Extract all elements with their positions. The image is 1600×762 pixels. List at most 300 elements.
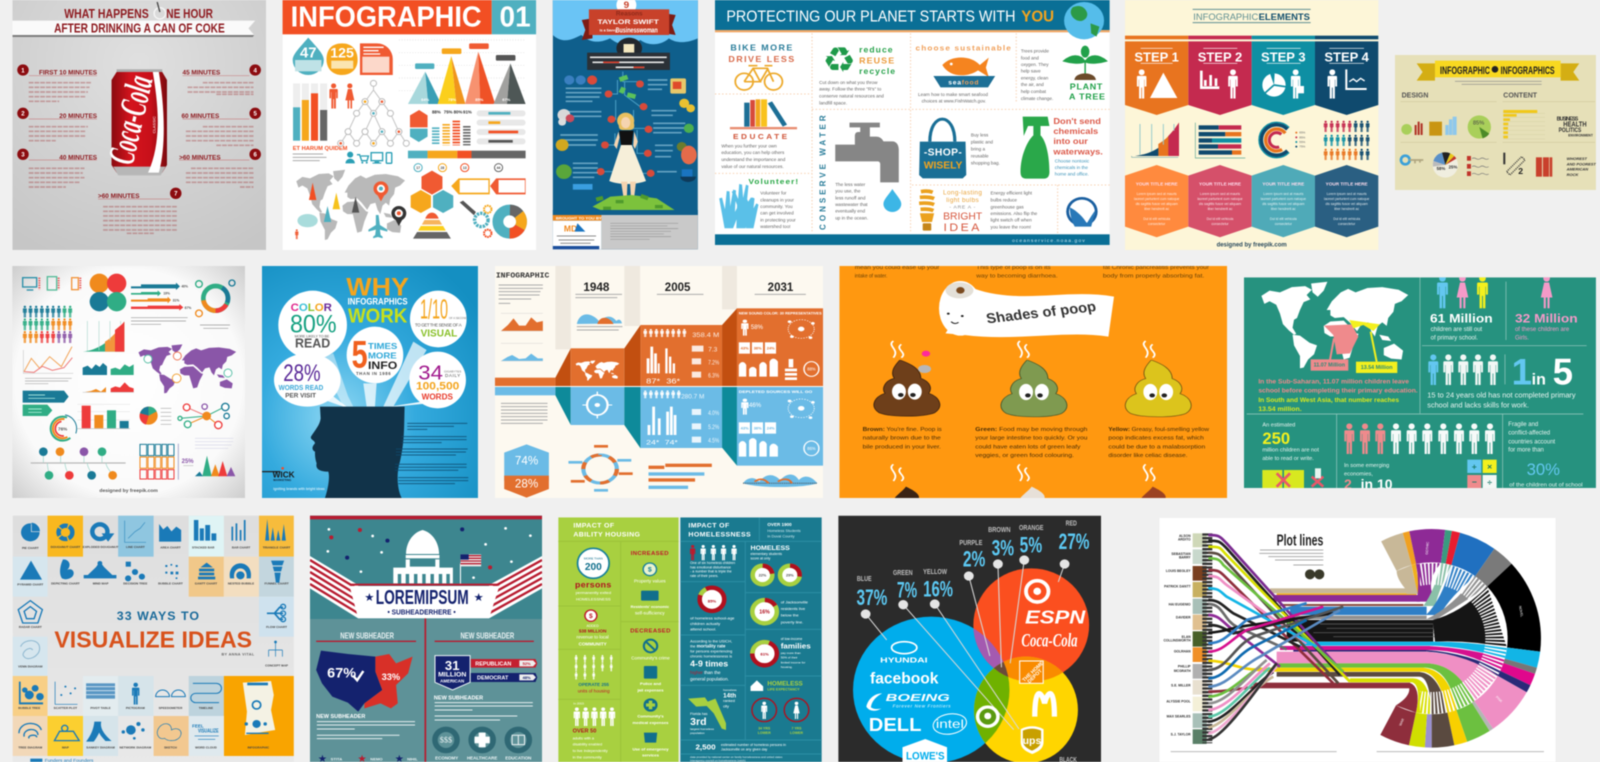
leader lines	[861, 555, 1070, 730]
volunteer: can get involved	[760, 211, 794, 216]
homeless people row: has emotional disturbance	[690, 565, 731, 569]
poop captions: Brown: You're fine. Poop is	[863, 427, 942, 433]
percentage labels: GREEN	[893, 568, 913, 577]
heading	[346, 277, 409, 324]
34 daily words	[416, 362, 461, 402]
hexagon badge and stripe bars	[410, 109, 472, 145]
round icons: EDUCATION	[505, 756, 531, 761]
conserve water: up in the ocean.	[835, 215, 868, 220]
step columns	[1125, 36, 1378, 115]
triangle chart: 64%	[421, 97, 430, 102]
color 80 percent: READ	[295, 337, 330, 351]
28 percent	[279, 360, 323, 399]
lower chevrons: Dui id elit vehicula	[1143, 217, 1170, 221]
mortality rate: 4-9 times	[690, 659, 728, 669]
arrow bars: 31%	[173, 299, 179, 303]
authors: DAVIDER	[1176, 615, 1191, 619]
timeline step markers and labels: 4	[253, 68, 258, 74]
families ring	[752, 637, 811, 669]
arc segment dividers and labels	[1398, 541, 1524, 727]
florida: 14th	[723, 692, 736, 699]
timeline step markers and labels: 60 MINUTES	[182, 113, 219, 120]
ability housing column: permanently exited	[576, 590, 612, 595]
usa split map	[316, 651, 413, 712]
timeline step markers and labels: >60 MINUTES	[179, 154, 221, 161]
bright idea bulb: IDEA	[944, 221, 982, 234]
arc segment dividers and labels: GOTHIC	[1425, 541, 1430, 555]
attend school ring: 85%	[708, 599, 717, 604]
blue brand logos: facebook	[870, 670, 939, 687]
chart tile backgrounds	[13, 516, 294, 756]
percent hexagons	[504, 444, 549, 498]
spray bottle and chemicals: Choose nontoxic	[1055, 158, 1090, 163]
mortality rate: chronic homelessness is	[690, 654, 732, 658]
educate	[721, 99, 797, 169]
ability housing column: 200	[585, 562, 602, 573]
chart: rising area	[1132, 123, 1179, 157]
homeless people row: - a number that is triple the	[690, 570, 732, 574]
flag	[460, 554, 481, 585]
wick logo: WICK	[273, 470, 295, 479]
white comb over fan	[1367, 573, 1497, 703]
mortality rate: higher than the	[690, 670, 721, 675]
coke can	[101, 69, 167, 175]
speech circles	[274, 291, 467, 408]
subheaders: NEW SUBHEADER	[340, 631, 394, 640]
head silhouette	[311, 407, 405, 498]
250 million	[1262, 422, 1323, 488]
poop captions: veggies, or green food colouring.	[975, 453, 1074, 459]
center divider	[423, 618, 428, 762]
triangle chart: 78%	[448, 97, 457, 102]
homeless rings: HOMELESS	[751, 545, 790, 552]
network nodes	[178, 403, 229, 429]
segmented bar: 28	[441, 166, 444, 170]
volunteer: watershed too!	[760, 224, 791, 229]
1948 contents	[576, 360, 619, 418]
pie chart	[140, 407, 171, 425]
authors: ALSON	[1179, 534, 1191, 538]
chart legend: 75%	[1299, 145, 1306, 149]
families ring: of low-income	[781, 637, 802, 641]
dividers	[1247, 277, 1587, 488]
gears and donut	[460, 201, 522, 237]
reduce reuse recycle: away. Follow the three "R's" to	[819, 87, 882, 92]
wick logo	[262, 467, 325, 491]
panel: lorem ipsum capitol	[310, 516, 542, 762]
people rows	[23, 306, 72, 343]
bright idea bulb: light switch off when	[991, 218, 1032, 223]
content charts: AMERICAN	[1566, 167, 1588, 172]
homeless total: estimated number of homeless persons in	[721, 743, 786, 747]
tile labels: VENN DIAGRAM	[18, 665, 43, 669]
plant a tree: PLANT	[1070, 82, 1103, 91]
percent hexagons: 28%	[515, 477, 538, 491]
percentage labels: 37%	[857, 586, 887, 610]
reduce reuse recycle: conserve natural resources and	[819, 93, 884, 98]
book cover thumbnails	[1193, 533, 1207, 744]
timeline	[31, 447, 126, 480]
lower chevrons: laoreet parturient cum natoque	[1134, 197, 1179, 201]
authors: HAI EUGENIO	[1169, 602, 1191, 606]
segmented bar: 44	[497, 166, 501, 170]
educate: EDUCATE	[733, 132, 790, 141]
top cut-off copy: body from properly absorbing fat.	[1103, 273, 1205, 279]
taylor swift figure	[609, 113, 646, 200]
headings: 1948	[583, 281, 609, 294]
device icons	[345, 152, 392, 164]
spray bottle and chemicals	[1021, 116, 1103, 179]
plant a tree: food and	[1021, 55, 1039, 60]
sub-saharan text: 13.54 million.	[1258, 407, 1302, 413]
poop captions: could have eaten lots of green leafy	[975, 445, 1081, 450]
poverty ring: 16%	[759, 610, 770, 616]
250 million: million children are not	[1262, 448, 1319, 454]
tile labels: TRIANGLE CHART	[263, 546, 290, 550]
volunteer: cleanups in your	[760, 197, 794, 202]
device grid	[140, 444, 178, 480]
conserve water: wastewater that	[835, 202, 868, 207]
fragile countries: 30%	[1527, 460, 1560, 479]
body copy right	[434, 696, 533, 720]
bike more drive less	[728, 43, 796, 90]
credit: designed by freepik.com	[1217, 242, 1287, 248]
republican democrat: 52%	[522, 661, 531, 666]
increased: DECREASED	[630, 628, 671, 634]
2005 contents: 7.2%	[708, 359, 720, 366]
reduce reuse recycle: REUSE	[859, 56, 895, 65]
percent label	[182, 438, 233, 466]
250 million: 250	[1262, 429, 1290, 448]
spray bottle and chemicals: home and office.	[1055, 172, 1089, 177]
families ring: housing.	[781, 665, 793, 669]
shop wisely: shopping bag.	[971, 160, 1000, 165]
star legend	[319, 754, 418, 762]
tile labels: PYRAMID CHART	[17, 582, 43, 586]
content charts: WHOREST	[1567, 156, 1588, 161]
percentage labels: BROWN	[988, 525, 1011, 534]
orange step band	[495, 308, 823, 386]
poop captions: bile produced in your liver.	[863, 445, 941, 450]
2031 contents: 36%	[754, 426, 762, 431]
step columns: STEP 3	[1261, 49, 1306, 64]
bright idea bulb: Energy efficient light	[991, 191, 1033, 196]
number markers and pipes	[597, 72, 655, 177]
title ribbon: Businesswoman	[616, 26, 658, 35]
2031 contents: 24%	[767, 346, 775, 351]
homelessness column	[680, 517, 822, 762]
ability housing column: COMMUNITY	[579, 641, 607, 646]
32 million: 32 Million	[1515, 312, 1578, 325]
poop captions: your large intestine too quickly. Or you	[975, 435, 1088, 441]
mortality rate	[690, 639, 732, 681]
increased: medical expenses	[633, 720, 669, 725]
shop wisely: reusable	[971, 153, 989, 158]
panel: 33 ways to visualize ideas	[13, 516, 294, 762]
percentage labels: 5%	[1020, 533, 1042, 557]
striped wings	[310, 556, 542, 618]
content charts: ENVIRONMENT	[1568, 133, 1593, 137]
hexagon badge and stripe bars: 88%	[432, 109, 441, 114]
homeless rings	[751, 545, 800, 584]
blue brand logos: DELL	[869, 715, 922, 736]
florida: population	[690, 731, 705, 735]
toilet paper banner: Shades of poop	[985, 299, 1098, 327]
plant a tree: Trees provide	[1021, 49, 1049, 54]
educate: education, you can help others	[721, 150, 785, 155]
chart legend: 85%	[1299, 135, 1306, 139]
top cut-off copy: This type of poop is on its	[976, 265, 1051, 271]
venn circles	[853, 568, 1089, 762]
2005 contents: 4.0%	[708, 409, 720, 417]
61 million	[1430, 275, 1493, 342]
line chart	[23, 347, 73, 384]
spray bottle and chemicals: chemicals in the	[1055, 165, 1088, 170]
panel: infographic elements steps	[1125, 0, 1378, 250]
title ribbon: Reasons	[616, 11, 643, 18]
plant a tree: the air, and	[1021, 82, 1044, 87]
lower chevrons: Lorem ipsum sed at mauris	[1327, 192, 1367, 196]
timeline step markers and labels: 6	[253, 153, 258, 159]
world map: 11.07 Million	[1314, 363, 1345, 369]
homeless rings: 29%	[786, 573, 794, 577]
percentage labels: 27%	[1059, 530, 1090, 554]
spray bottle and chemicals: Don't send	[1053, 116, 1101, 126]
lower chevrons: laoreet parturient cum natoque	[1261, 197, 1306, 201]
bright idea bulb: bulbs reduce	[991, 198, 1018, 203]
timeline step markers and labels: 20 MINUTES	[59, 113, 97, 120]
spray bottle and chemicals: into our	[1053, 136, 1088, 146]
families ring: limited income for	[781, 660, 805, 664]
attend school ring	[690, 588, 735, 632]
timeline step markers and labels: 7	[174, 192, 178, 198]
2 in 10: In some emerging	[1344, 463, 1389, 469]
title	[54, 609, 255, 657]
lower chevrons: YOUR TITLE HERE	[1262, 182, 1304, 187]
headings: 2005	[665, 281, 690, 294]
tile labels: EXPLODED DOUGHNUT	[83, 545, 119, 549]
shop wisely: plastic and	[971, 139, 994, 144]
34 daily words: DAILY	[445, 373, 460, 378]
homeless total: 2,500	[695, 743, 716, 752]
reduce reuse recycle: Cut down on what you throw	[819, 80, 878, 85]
tile labels: RADAR CHART	[19, 625, 42, 629]
tile labels: PICTOGRAM	[126, 706, 145, 710]
tile labels: WORD CLOUD	[195, 745, 218, 749]
timeline step markers and labels: 3	[21, 153, 25, 159]
fragile countries: conflict-affected	[1508, 431, 1550, 437]
percentage labels: ORANGE	[1019, 523, 1044, 532]
arc segment dividers and labels: WAR	[1398, 717, 1405, 727]
homeless total	[690, 743, 786, 762]
world map	[1261, 282, 1408, 373]
dotted dividers	[715, 33, 1110, 233]
body copy right: NEW SUBHEADER	[434, 696, 483, 702]
segmented bar: 17	[416, 166, 420, 170]
percentage labels: 2%	[963, 547, 985, 572]
educate: When you further your own	[721, 143, 777, 148]
lower chevrons: liber hendrerit ac	[1271, 207, 1296, 211]
republican democrat	[435, 656, 537, 690]
reduce reuse recycle: landfill space.	[819, 101, 847, 106]
34 daily words: 100,500	[416, 380, 459, 392]
one tenth: OF A SECOND	[449, 316, 467, 320]
mortality rate: general population.	[690, 676, 729, 681]
2 in 10: ÷	[1487, 477, 1492, 487]
percent label: 25%	[182, 459, 194, 465]
2005 contents: 7.3	[708, 346, 717, 353]
ribbon title	[1417, 61, 1579, 84]
florida: 3rd	[690, 717, 707, 728]
lower chevrons: YOUR TITLE HERE	[1326, 182, 1368, 187]
title	[1193, 9, 1311, 23]
volunteer: community. You	[760, 204, 793, 209]
title: ELEMENTS	[1259, 12, 1310, 22]
poverty ring: of Jacksonville	[781, 599, 809, 604]
tile labels	[17, 545, 290, 749]
life expectancy	[751, 680, 809, 735]
tile labels: AREA CHART	[160, 546, 181, 550]
tile labels: MIND MAP	[93, 582, 108, 586]
poop captions: Green: Food may be moving through	[975, 427, 1088, 433]
lower chevrons: laoreet parturient cum natoque	[1324, 197, 1369, 201]
sustainable seafood: choose sustainable	[916, 44, 1012, 53]
hexagons, tags and pyramid	[411, 171, 526, 239]
title ribbon: 9	[624, 0, 630, 11]
chart icons	[18, 519, 286, 742]
increased: Police and	[640, 681, 662, 686]
homeless total: Jacksonville on any given day	[721, 748, 768, 752]
coke can: CLASSIC	[151, 116, 156, 133]
2005 contents: 5.2%	[708, 423, 720, 431]
2005 contents: 87*	[646, 377, 661, 385]
5 times more info: THAN IN 1986	[356, 371, 391, 376]
ability housing column: units of housing	[578, 688, 610, 693]
title: BY ANNA VITAL	[221, 653, 255, 657]
device icons	[23, 277, 80, 290]
timeline step markers and labels: 40 MINUTES	[59, 154, 97, 161]
home depot logo: THE HOME	[1021, 660, 1046, 683]
tile labels: BUBBLE CHART	[158, 582, 183, 586]
yellow poop	[1125, 341, 1191, 417]
61 million: 61 Million	[1430, 312, 1493, 325]
2005 contents: 74*	[665, 439, 678, 446]
authors: MCGRATH	[1174, 669, 1191, 673]
tile labels: DOUGHNUT CHART	[51, 545, 80, 549]
1 in 5: 1	[1512, 351, 1532, 392]
segmented bar: 13	[463, 166, 467, 170]
color 80 percent: MORE LIKELY TO BE	[295, 334, 330, 338]
section heads: DESIGN	[1402, 92, 1428, 99]
central body copy	[501, 403, 547, 423]
world map: 13.54 Million	[1361, 365, 1392, 371]
plant a tree	[1021, 46, 1107, 101]
plant a tree: help save	[1021, 69, 1041, 74]
title ribbon: TAYLOR SWIFT	[597, 19, 660, 26]
bike more drive less: DRIVE LESS	[728, 54, 796, 64]
educate: value of our natural resources.	[721, 164, 784, 169]
increased: Residents' economic	[631, 605, 669, 609]
left small charts	[501, 313, 622, 361]
ability housing column: OVER 50	[573, 729, 596, 735]
percentage labels: PURPLE	[959, 538, 982, 547]
conserve water	[818, 113, 901, 230]
horizontal color bands	[1253, 588, 1437, 688]
attend school ring: attend school.	[690, 627, 716, 632]
color 80 percent: 80%	[290, 310, 337, 338]
headings: 2031	[768, 281, 793, 294]
republican democrat: REPUBLICAN	[475, 661, 511, 667]
florida	[688, 688, 737, 735]
tile labels: NESTED BUBBLE	[228, 582, 254, 586]
header	[715, 0, 1110, 39]
authors	[1163, 534, 1191, 736]
ability housing column: In 2013:	[573, 702, 585, 706]
layered area chart	[743, 474, 817, 487]
arc segment dividers and labels: NOVEL	[1518, 606, 1524, 618]
tile labels: FLOW CHART	[266, 625, 287, 629]
reduce reuse recycle: ♻	[822, 39, 856, 81]
blue brand logos: Forever New Frontiers	[893, 703, 951, 708]
usa split map: 33%	[382, 672, 400, 682]
title: NE HOUR	[166, 6, 213, 21]
lower chevrons: dis sagittis fusce vel aliquam	[1326, 202, 1368, 206]
republican democrat: 48%	[522, 675, 531, 680]
heading	[1259, 533, 1324, 579]
authors: S.E. MILLER	[1171, 684, 1191, 688]
title: 33 WAYS TO	[117, 609, 200, 623]
authors: ALYSSIE POOL	[1166, 699, 1191, 703]
poop captions: could be due to a malabsorption	[1108, 445, 1206, 450]
authors: ARDITO	[1178, 538, 1191, 542]
ability housing column: OPERATE 255	[578, 682, 609, 687]
tile labels: TREE DIAGRAM	[18, 745, 43, 749]
2005 contents: 6.3%	[708, 372, 720, 379]
lower chevrons: liber hendrerit ac	[1144, 207, 1169, 211]
bike more drive less: BIKE MORE	[730, 43, 794, 53]
title banner: ★	[473, 593, 483, 604]
fragile countries	[1508, 422, 1583, 489]
sponsor footer	[553, 210, 698, 249]
plant a tree: energy, clean	[1021, 75, 1049, 80]
32 million: of these children are	[1515, 327, 1570, 333]
1 in 5	[1427, 351, 1576, 409]
2031 contents: 43%	[741, 426, 749, 431]
top cut-off copy	[855, 265, 1210, 279]
toilet paper banner	[939, 281, 1114, 337]
fan into arc	[1396, 563, 1507, 714]
one tenth: 1/10	[420, 293, 448, 324]
florida: largest homeless	[690, 727, 714, 731]
usa split map: 67%	[327, 666, 356, 681]
poop captions	[863, 427, 1209, 459]
content charts	[1503, 110, 1596, 177]
title: WHAT HAPPENS	[64, 6, 149, 21]
panel: plot lines	[1159, 518, 1556, 762]
timeline step markers and labels: 45 MINUTES	[183, 70, 220, 77]
round icons: HEALTHCARE	[467, 756, 497, 761]
reduce reuse recycle: reduce	[859, 46, 894, 55]
ability housing column: IMPACT OF	[573, 523, 614, 530]
outer arc segments	[1339, 546, 1524, 731]
authors: PATRICK DANTT	[1164, 584, 1191, 588]
home depot logo: DEPOT	[1027, 668, 1044, 685]
light rays	[320, 342, 428, 407]
percentage labels: RED	[1066, 519, 1077, 527]
percentage labels: 7%	[897, 578, 917, 602]
arrow bars: 19%	[163, 292, 170, 296]
title: AFTER DRINKING A CAN OF COKE	[54, 21, 225, 36]
